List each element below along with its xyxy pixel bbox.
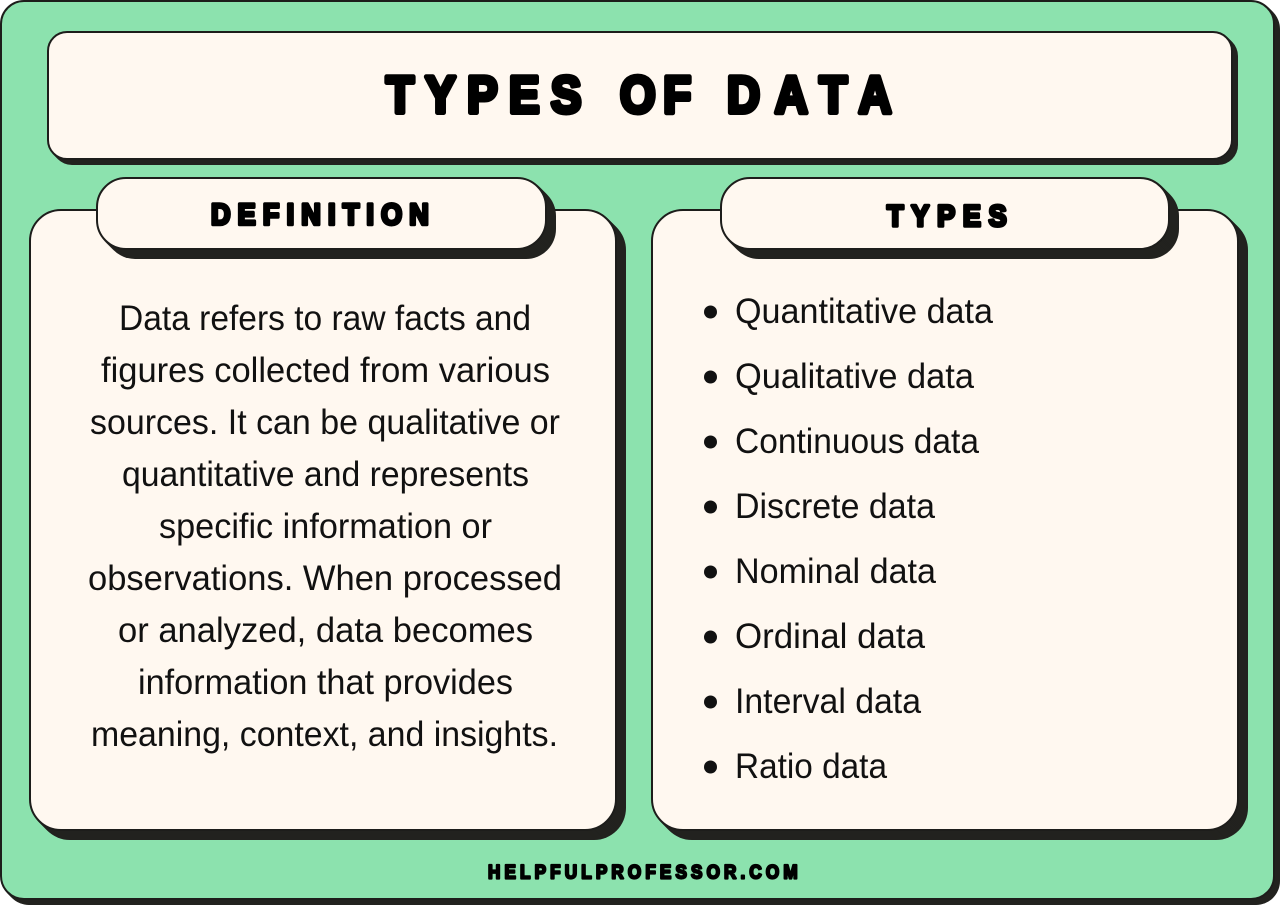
title: TYPES [386, 67, 581, 124]
item: continuous: Continuous data [735, 421, 979, 461]
heading: types [720, 177, 1170, 250]
footer: HELPFULPROFESSOR.COM [488, 862, 798, 883]
title [384, 67, 892, 124]
item: interval: Interval data [735, 681, 921, 721]
item: ratio: Ratio data [735, 746, 887, 786]
definition text [88, 298, 562, 754]
item: discrete: Discrete data [735, 486, 935, 526]
title: DATA [727, 67, 892, 124]
item: quantitative: Quantitative data [735, 291, 993, 331]
item: qualitative: Qualitative data [735, 356, 974, 396]
definition text: observations. When processed [88, 558, 562, 598]
definition text: quantitative and represents [122, 454, 529, 494]
definition text: or analyzed, data becomes [118, 610, 533, 650]
definition text: meaning, context, and insights. [91, 714, 558, 754]
definition text: figures collected from various [101, 350, 550, 390]
types label: TYPES [887, 200, 1007, 233]
item: nominal: Nominal data [735, 551, 936, 591]
title: OF [620, 67, 691, 124]
panel: definition [29, 209, 617, 831]
types list [704, 291, 993, 786]
heading: definition [96, 177, 547, 250]
definition text: Data refers to raw facts and [119, 298, 531, 338]
definition label: DEFINITION [211, 198, 429, 232]
definition text: sources. It can be qualitative or [90, 402, 560, 442]
item: ordinal: Ordinal data [735, 616, 925, 656]
definition text: information that provides [138, 662, 513, 702]
title banner [47, 31, 1233, 160]
panel: types [651, 209, 1239, 831]
definition text: specific information or [159, 506, 492, 546]
